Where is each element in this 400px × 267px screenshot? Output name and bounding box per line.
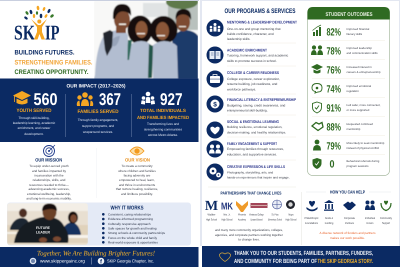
logo: morehouse: Westwood College [249,212,264,216]
stat: youth served [13,90,58,136]
p4 [172,30,198,79]
stat: total individuals and families [137,90,190,137]
icon: target [44,145,55,156]
logo: SKIP: IP [45,20,60,44]
tagline: BUILDING FUTURES. [14,50,75,56]
logo: phoenix: Phoenix [238,212,246,216]
photo: student writing: LEADER [36,230,50,234]
panel: our mission: and long-term economic mobility. [26,196,72,200]
logo: MK: Mrs. Jr. [224,212,231,216]
outcome: 76%: Increased interest in [346,65,372,69]
stat: youth served: 560 [34,90,58,109]
icon: facebook [98,258,104,265]
help: individual: Donors [366,221,374,225]
program: social emotional: SOCIAL & EMOTIONAL LEARNING [227,119,279,124]
p2 [128,16,152,44]
panel: our vision: To create a community [121,164,153,168]
program: college: resume building, job readiness, and [227,82,278,86]
help: grants: Grants & [325,216,333,220]
list: reasons: Consistent, caring relationships [108,212,151,216]
photo: student writing: FUTURE [36,226,50,230]
program: financial: FINANCIAL LITERACY & ENTREPRENEURSHIP [227,97,296,102]
outcome: 91% [312,102,381,114]
heading: partnerships: PARTNERSHIPS THAT CHANGE LIVES [220,191,282,196]
outcome: 74%: regulation [346,89,359,93]
heading: how you can help: HOW YOU CAN HELP [330,190,365,194]
outcome: 79%: 79% [326,140,341,152]
text: diverse network [320,231,376,240]
panel: our vision: and limitless possibility. [121,192,153,196]
icon: heart [206,122,224,138]
outcome: 91%: Felt safer, more connected, [346,103,381,107]
help: philanthropic: Philanthropic [304,216,319,220]
stat: families served: wraparound services. [83,130,113,134]
outcome: 79%: instead of physical conflict [346,146,379,150]
text: partnerships note [215,228,283,242]
panel: student outcomes [308,7,390,176]
program: social emotional: decision-making, and healthy relationships. [227,130,286,134]
outcome: 76%: careers & entrepreneurship [346,70,381,74]
outcome: 78%: and communication skills [346,51,378,55]
help: corporate: Corporate [344,216,355,220]
stat: total individuals and families: AND FAMILIES IMPACTED [137,115,190,120]
logo: phoenix [236,201,248,221]
icon: graduation cap [13,91,31,104]
panel: our mission [26,145,72,200]
panel: our mission: OUR MISSION [35,158,63,163]
header: student outcomes [308,7,390,20]
program: mentoring: builds confidence, character, and [227,32,274,36]
panel: our vision: where children and families [118,169,156,173]
outcome: 82%: 82% [326,26,341,38]
list: reasons: Focus on the whole child and family [108,236,157,240]
icon: people [311,45,323,55]
logo: M: Walker [208,212,216,216]
icon: dollar: $ [213,101,217,108]
outcome: 76%: 76% [326,64,341,76]
icon: shield check [312,158,322,169]
outcome: 74%: 74% [326,83,341,95]
footer: thank you banner: AND COMMUNITY FOR BEING PART OF [234,258,317,265]
panel: our vision: and thrive in environments [119,183,156,187]
program: mentoring: One-on-one and group mentoring that [227,27,281,31]
heading: our impact: OUR IMPACT (2017–2026) [66,83,126,89]
footer: left: www.skippergainc.org [40,258,86,264]
program: financial: Budgeting, saving, credit awareness, and [227,104,286,108]
outcome: 78% [311,45,378,57]
outcome: 74% [312,83,371,95]
outcome: 79%: More likely to seek mentorship [346,141,385,145]
icon: book [206,46,224,64]
icon: mentoring [206,20,224,36]
icon: facebook: f [100,258,103,265]
outcome: 79% [313,140,385,152]
panel: our mission: resources needed to thrive— [29,183,70,187]
icon: cap [311,64,323,74]
program: creative expression: CREATIVE EXPRESSION & LIFE SKILLS [227,164,285,169]
stat: total individuals and families: 927 [160,90,182,109]
outcome: 82%: Improved financial [346,27,370,31]
program: mentoring [206,20,298,41]
outcome: 88%: Requested continued [346,122,373,126]
footer: left: SKIP Georgia Chapter, Inc. [107,258,154,264]
outcome: 88%: 88% [326,121,341,133]
text: partnerships note: agencies, and corporate partners working together [215,233,283,237]
logo: MK: High School [222,217,233,221]
stat: total individuals and families: strengthening communities [144,128,182,132]
panel: our mission: advancing academic success, [28,187,70,191]
list: reasons: Evidence-informed programming [108,217,153,221]
logo: phoenix: Academy [238,217,246,221]
stat: families served: Through family engagement, [78,118,118,122]
text: partnerships note: and many more community organizations, colleges, [215,228,283,232]
program: college [206,70,280,92]
heading: programs and services: OUR PROGRAMS & SERVICES [224,8,296,15]
logo: St Pius: St. Pius [272,212,279,216]
outcome: 88% [312,121,373,133]
help: corporate [343,202,356,225]
stat: total individuals and families: TOTAL INDIVIDUALS [140,108,186,113]
program: college: COLLEGE & CAREER READINESS [227,70,279,75]
header: student outcomes: STUDENT OUTCOMES [326,12,373,18]
panel: our vision [116,147,158,196]
program: creative expression: Photography, storytelling, arts, and [227,170,273,174]
stat: youth served: development. [24,132,44,136]
stat: families served: support programs, and [82,124,114,128]
icon: shield [312,102,322,113]
icon: chart [312,25,321,36]
tagline: STRENGTHENING FAMILIES. [14,59,93,66]
outcome: 76% [311,64,381,76]
program: financial [206,96,296,112]
panel: our mission: incarceration with the [34,173,64,177]
help: individual [365,200,375,225]
logo: Mays: High School [286,217,297,221]
panel: our vision: facing adversity are [124,173,151,177]
panel: our mission: emotional wellbeing, leadership, [27,192,71,196]
heading: why it works: WHY IT WORKS [110,206,144,212]
help: community: Community [380,216,392,220]
p3 [150,16,178,44]
outcome: 74%: Improved emotional [346,84,371,88]
list: reasons [102,212,166,244]
logo: morehouse: Upward Bound [250,217,263,221]
stat: families served: 367 [99,90,121,109]
footer: thank you banner: THE SKIP GEORGIA STORY. [318,258,373,265]
panel: how you can help [304,190,392,240]
program: family engagement: education, and supportive services. [227,152,277,156]
panel: our vision: that nurture healing, resilience, [116,187,158,191]
outcome: 78%: Improved leadership [346,46,372,50]
p1 [94,30,128,79]
panel: our vision: OUR VISION [125,158,151,163]
program: academic: Tutoring, homework support, and academic [227,54,289,58]
program: mentoring: leadership skills. [227,37,250,41]
panel: partnerships [205,191,297,242]
logo: M [205,199,218,221]
icon: briefcase [206,70,224,88]
program: academic: skills to promote success in school. [227,59,277,63]
program: family engagement: FAMILY ENGAGEMENT & SUPPORT [227,141,277,146]
icon: globe [30,258,36,264]
program: mentoring: MENTORING & LEADERSHIP DEVELOPMENT [227,20,298,24]
program: creative expression [206,164,290,180]
program: social emotional [206,119,286,138]
outcome: 0 [312,158,380,170]
panel: left page [0,0,198,267]
stat: families served: FAMILIES SERVED [78,109,119,115]
help: philanthropic [304,201,319,225]
stat: total individuals and families: across Metro Atlanta. [148,133,178,137]
help: grants: Funding [325,221,334,225]
photo: four students [94,0,198,79]
logo: Mays [286,200,297,221]
logo: MK [221,202,234,221]
list: programs [206,20,298,180]
program: creative expression: hands-on experiences that inspire and engage. [227,176,290,180]
logo: Mays: Mays [288,212,294,216]
panel: our mission: and families impacted by [32,169,66,173]
help: corporate: Partners [345,221,355,225]
icon: brain [312,84,322,93]
logo: St Pius [268,200,282,221]
text: partnerships note: to change lives. [238,238,260,242]
panel: our mission: To equip under-served youth [29,164,69,168]
help: individual: Individual [365,216,375,220]
text: diverse network: A diverse network of funders and partners [320,231,376,235]
footer: left: Together, We Are Building Brighter Futures! [37,250,156,258]
list: reasons: Real-world exposure & opportunities [108,240,158,244]
list: reasons: Strong schools & community partnerships [108,231,166,235]
stat: youth served: Through skill-building, [18,116,50,120]
logo: SKIP: SK [14,20,35,44]
list: reasons: Safe spaces for growth and healing [108,226,157,230]
program: college: College exposure, career exploration, [227,77,280,81]
stat: youth served: leadership learning, academic [13,121,56,125]
icon: family [77,92,93,106]
logo: MK: MK [221,202,234,212]
logo: SKIP [14,6,60,44]
list: reasons: Culturally responsive approach [108,222,151,226]
footer: thank you banner [202,246,400,267]
icon: palette [206,164,224,180]
icon: heart [219,253,231,262]
panel: our impact [0,78,198,142]
outcome: 0: 0 [330,158,335,170]
icon: eye [130,147,144,155]
tagline [14,50,93,76]
program: financial: entrepreneurial skill-building. [227,108,268,112]
stat: families served [77,90,121,134]
stat: total individuals and families: Transforming lives and [147,122,179,126]
panel: why it works [7,202,191,246]
help: community: Support [382,221,390,225]
outcome: 0: program sessions [346,164,369,168]
logo: St Pius: Elementary School [268,217,282,221]
outcome: 82%: literacy skills [346,32,363,36]
icon: person [313,140,321,150]
program: college: workforce pathways. [227,88,256,92]
panel: our mission: relationships, skills, and [33,178,66,182]
panel: right page [202,1,399,246]
help: community [380,201,392,225]
photo: student writing [7,203,88,245]
icon: group [141,92,155,104]
outcome: 78%: 78% [326,45,341,57]
icon: family [206,140,224,158]
outcome: 91%: 91% [326,102,341,114]
footer: left [0,247,198,267]
help: philanthropic: Foundations [305,221,318,225]
stat: youth served: YOUTH SERVED [16,108,52,114]
outcome: 0: Behavioral referrals during [346,159,380,163]
program: family engagement: Empowering families through resources, [227,147,284,151]
logo: morehouse [249,203,268,221]
stat: youth served: enrichment, and career [18,126,51,130]
text: diverse network: makes our work possible. [330,236,365,240]
outcome: 88%: mentorship [346,127,361,131]
help: grants [324,200,334,225]
program: academic [206,46,289,64]
outcome: 91%: or more supported [346,108,370,112]
logo: M: High School [206,217,217,221]
program: academic: ACADEMIC ENRICHMENT [227,48,268,52]
panel: our vision: empowered to heal, learn, [119,178,155,182]
icon: handshake [312,122,323,130]
program: social emotional: Building resilience, emotional regulation, [227,125,283,129]
outcome: 82% [312,25,370,38]
program: family engagement [206,140,284,158]
tagline: CREATING OPPORTUNITY. [14,69,89,76]
logo: M: M [205,199,218,214]
